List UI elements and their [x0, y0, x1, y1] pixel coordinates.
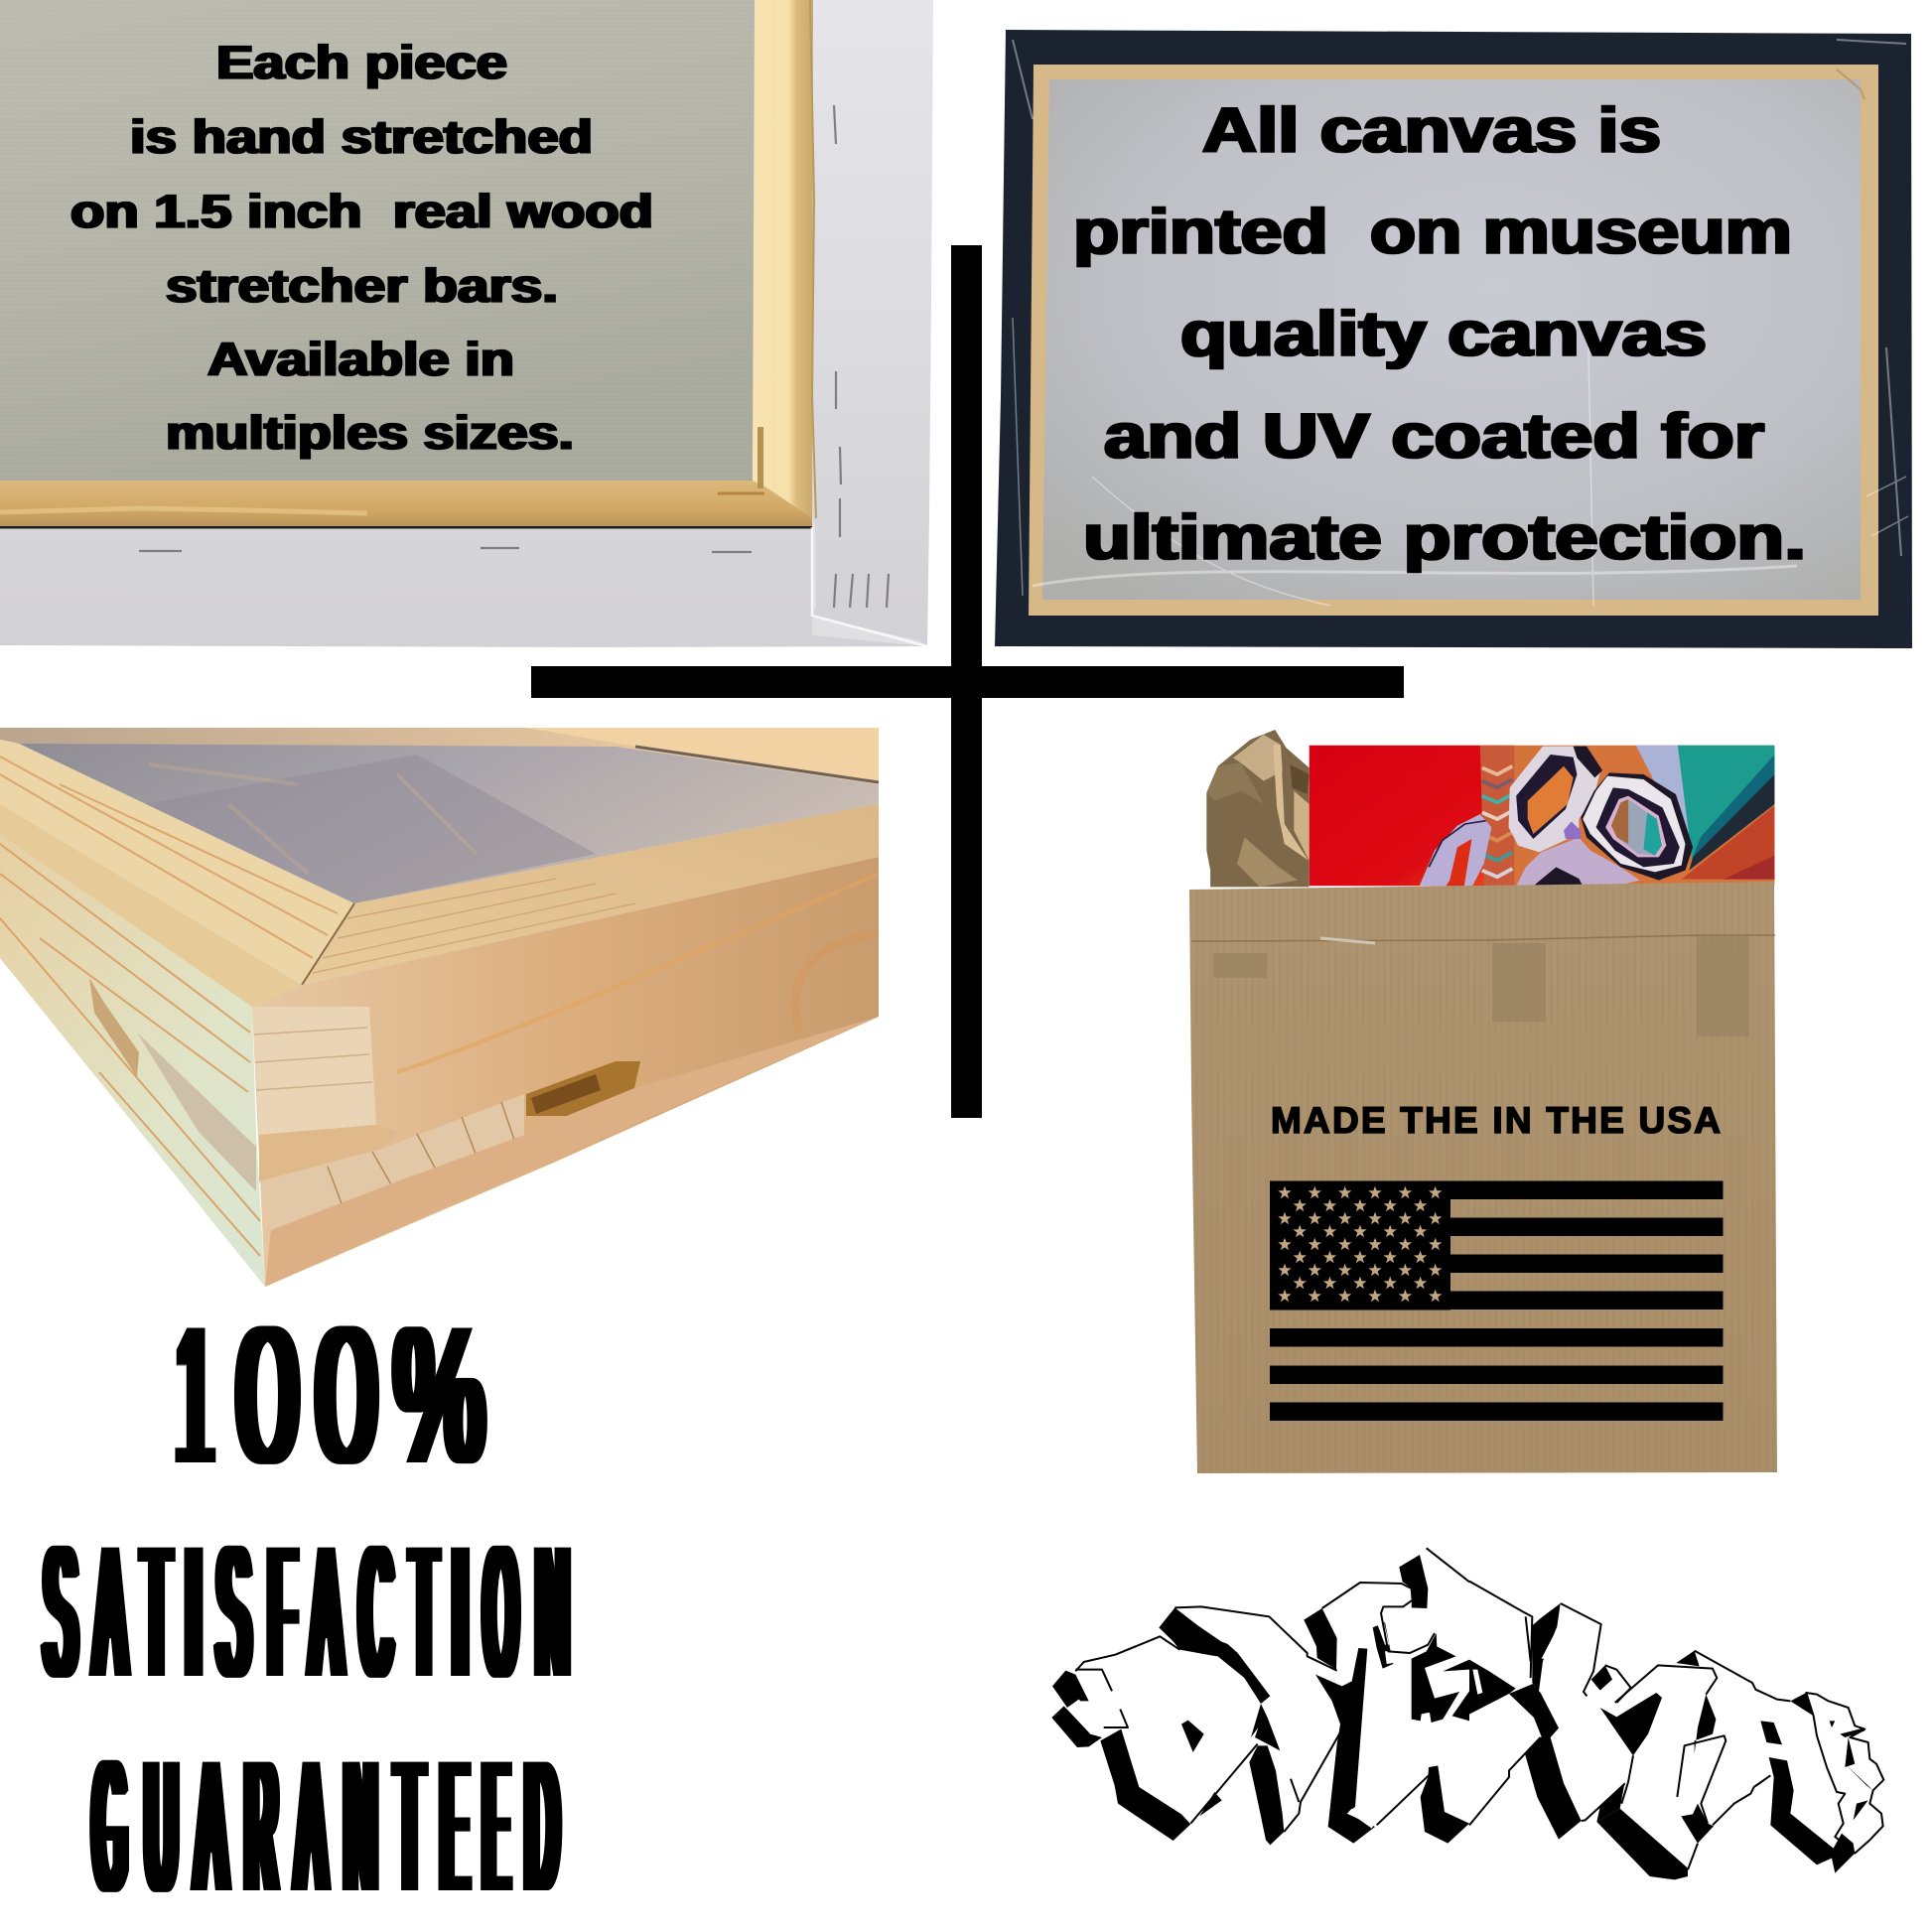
text: museum quality caption: [1073, 94, 1806, 573]
end grain: [252, 1007, 376, 1135]
text: museum quality caption: ultimate protection.: [1083, 501, 1806, 573]
text: hand stretched caption: multiples sizes.: [166, 406, 574, 459]
text: D: [526, 1722, 558, 1930]
text: 100% satisfaction guaranteed: S: [45, 1507, 76, 1716]
text: hand stretched caption: Available in: [207, 333, 514, 385]
canvas surface and back bar: [0, 728, 879, 903]
text: 100% satisfaction guaranteed: O: [484, 1507, 516, 1716]
text: 100% satisfaction guaranteed: T: [396, 1722, 423, 1930]
chain link: [1420, 814, 1491, 886]
text: 100% satisfaction guaranteed: A: [197, 1722, 226, 1930]
right side face: [252, 857, 879, 1287]
text: 100% satisfaction guaranteed: 0: [316, 1286, 377, 1504]
text: 100% satisfaction guaranteed: [45, 1286, 568, 1930]
icon: black american flag: [1270, 1181, 1724, 1421]
text: 100% satisfaction guaranteed: C: [360, 1507, 391, 1716]
cross divider: [531, 245, 1404, 1118]
icon: graffiti logo: [1051, 1548, 1883, 1879]
panel: shipping box with art and flag: [1189, 730, 1777, 1473]
text: 100% satisfaction guaranteed: A: [311, 1507, 342, 1716]
text: 100% satisfaction guaranteed: S: [217, 1507, 250, 1716]
text: hand stretched caption: is hand stretched: [130, 110, 593, 163]
text: hand stretched caption: on 1.5 inch real wood: [70, 185, 653, 237]
text: 100% satisfaction guaranteed: F: [269, 1507, 295, 1716]
goggle lens left: [1509, 747, 1602, 852]
text: 100% satisfaction guaranteed: A: [95, 1507, 126, 1716]
panel: museum quality canvas photo: [995, 30, 1912, 648]
text: hand stretched caption: [70, 36, 653, 459]
text: 100% satisfaction guaranteed: 1: [177, 1286, 212, 1504]
panel: hand stretched canvas photo: [0, 0, 933, 647]
text: 100% satisfaction guaranteed: G: [94, 1722, 126, 1930]
mortise slot: [526, 1061, 640, 1116]
text: 100% satisfaction guaranteed: T: [143, 1507, 170, 1716]
text: 100% satisfaction guaranteed: I: [185, 1507, 203, 1716]
text: hand stretched caption: Each piece: [216, 36, 507, 88]
text: 100% satisfaction guaranteed: %: [394, 1286, 484, 1504]
text: 100% satisfaction guaranteed: E: [484, 1722, 508, 1930]
text: 100% satisfaction guaranteed: T: [411, 1507, 437, 1716]
packing tape strips: [1213, 935, 1749, 1036]
text: 100% satisfaction guaranteed: A: [297, 1722, 326, 1930]
text: N: [537, 1507, 568, 1716]
text: 100% satisfaction guaranteed: I: [452, 1507, 470, 1716]
panel: wood stretcher bar corner photo: [0, 728, 879, 1287]
artwork: colourful painting: [1310, 746, 1774, 886]
flap crease: [1191, 935, 1775, 941]
left bevel: [0, 740, 354, 985]
text: museum quality caption: All canvas is: [1202, 94, 1661, 166]
text: museum quality caption: and UV coated for: [1104, 400, 1764, 472]
text: museum quality caption: printed on museum: [1073, 196, 1792, 267]
text: 100% satisfaction guaranteed: R: [246, 1722, 277, 1930]
text: 100% satisfaction guaranteed: E: [442, 1722, 468, 1930]
cardboard box: [1189, 882, 1777, 1473]
icon: crumpled kraft paper: [1206, 730, 1310, 887]
text: 100% satisfaction guaranteed: 0: [236, 1286, 299, 1504]
left side face: [0, 804, 302, 1287]
text: hand stretched caption: stretcher bars.: [166, 259, 558, 312]
plastic wrap highlights: [1013, 40, 1908, 606]
text: museum quality caption: quality canvas: [1180, 298, 1707, 369]
staples on canvas fold: [139, 105, 889, 608]
text: 100% satisfaction guaranteed: N: [345, 1722, 376, 1930]
text: 100% satisfaction guaranteed: U: [146, 1722, 177, 1930]
text: made in the usa: MADE THE IN THE USA: [1271, 1100, 1721, 1141]
goggle lens right: [1581, 772, 1693, 881]
mortise wedge: [259, 1094, 524, 1230]
right bevel: [302, 804, 879, 985]
lower lilac form: [1516, 837, 1640, 886]
